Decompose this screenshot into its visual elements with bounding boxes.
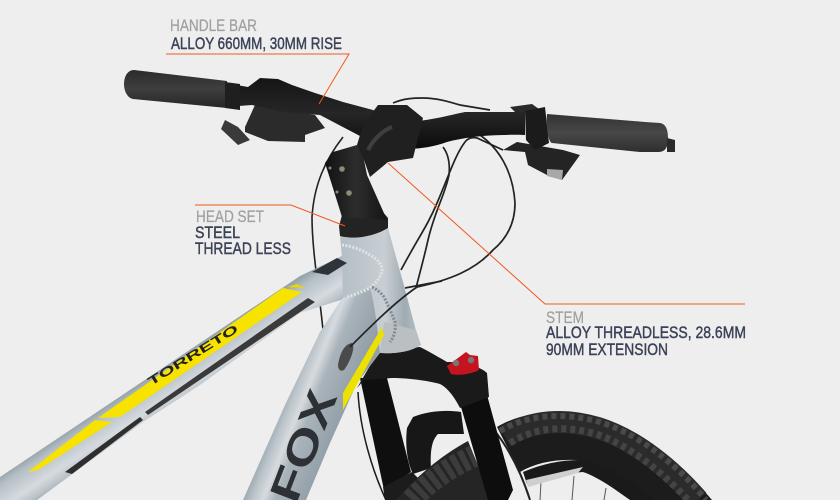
suspension fork front parts (357, 347, 530, 500)
tread knobs inner (510, 429, 688, 500)
callout: stem (388, 163, 746, 359)
head tube (340, 228, 421, 353)
spokes (540, 476, 606, 500)
value line two: 90MM EXTENSION (546, 340, 668, 359)
left shifter lever (221, 120, 250, 145)
weld bead lower (372, 287, 395, 342)
bicycle frame (0, 228, 421, 500)
tread knobs outer (500, 416, 706, 500)
left stanchion (360, 378, 411, 490)
weld bead upper (342, 245, 382, 297)
dropout bracket (383, 472, 420, 500)
top tube (0, 256, 350, 500)
value: ALLOY 660MM, 30MM RISE (171, 34, 342, 53)
value line one: STEEL (195, 223, 240, 242)
brake and shift cables (350, 98, 515, 347)
suspension fork rear parts (358, 378, 464, 500)
tyre behind fork leg (396, 441, 492, 500)
cable port (338, 343, 353, 371)
brake cable at fork (358, 392, 386, 500)
handlebar tube (225, 78, 525, 149)
callout: head set (195, 205, 345, 258)
head set cup (339, 205, 388, 238)
brake arch (406, 411, 464, 474)
cable behind frame (312, 137, 343, 330)
right stanchion (459, 395, 513, 500)
head tube lower band (380, 322, 421, 353)
down tube (243, 287, 395, 500)
stem steerer clamp (325, 145, 387, 220)
down tube yellow stripe (343, 327, 384, 410)
top tube yellow stripe lower (28, 420, 112, 472)
rim (523, 460, 672, 500)
tread left (412, 456, 474, 500)
tyre sidewall (497, 412, 712, 500)
left grip collar (225, 82, 240, 110)
fender stay (494, 430, 530, 500)
value line two: THREAD LESS (195, 239, 291, 258)
left shifter body (245, 105, 325, 142)
front wheel right part (497, 412, 712, 500)
right brake lever blade (547, 169, 563, 180)
leader line (388, 163, 745, 304)
tread base (505, 422, 698, 500)
bar end (667, 138, 675, 152)
stem body (357, 105, 423, 177)
model name: TORRETO (145, 322, 241, 389)
tyre left section (396, 441, 492, 500)
stem and headset (325, 105, 423, 238)
leader line (195, 205, 345, 226)
right grip (547, 114, 668, 152)
right control box (510, 104, 543, 112)
top tube dark stripe lower (65, 417, 143, 474)
fork crown (357, 347, 489, 408)
leader line (166, 54, 349, 104)
stem highlight (368, 127, 392, 150)
sticker (312, 258, 347, 275)
top tube yellow stripe upper (98, 288, 302, 418)
yellow chevron (287, 284, 305, 288)
right brake lever (503, 142, 580, 180)
label: STEM (546, 308, 584, 327)
red adjuster cap (447, 352, 479, 375)
callout: handle bar (166, 16, 349, 104)
label: HEAD SET (196, 207, 264, 226)
top tube dark stripe upper (145, 298, 315, 415)
right brake clamp (525, 107, 549, 150)
stem bolts (328, 166, 352, 196)
left grip (124, 70, 227, 108)
handlebar (124, 70, 675, 180)
value line one: ALLOY THREADLESS, 28.6MM (546, 323, 746, 342)
rim highlight (526, 467, 583, 487)
label: HANDLE BAR (170, 16, 257, 35)
